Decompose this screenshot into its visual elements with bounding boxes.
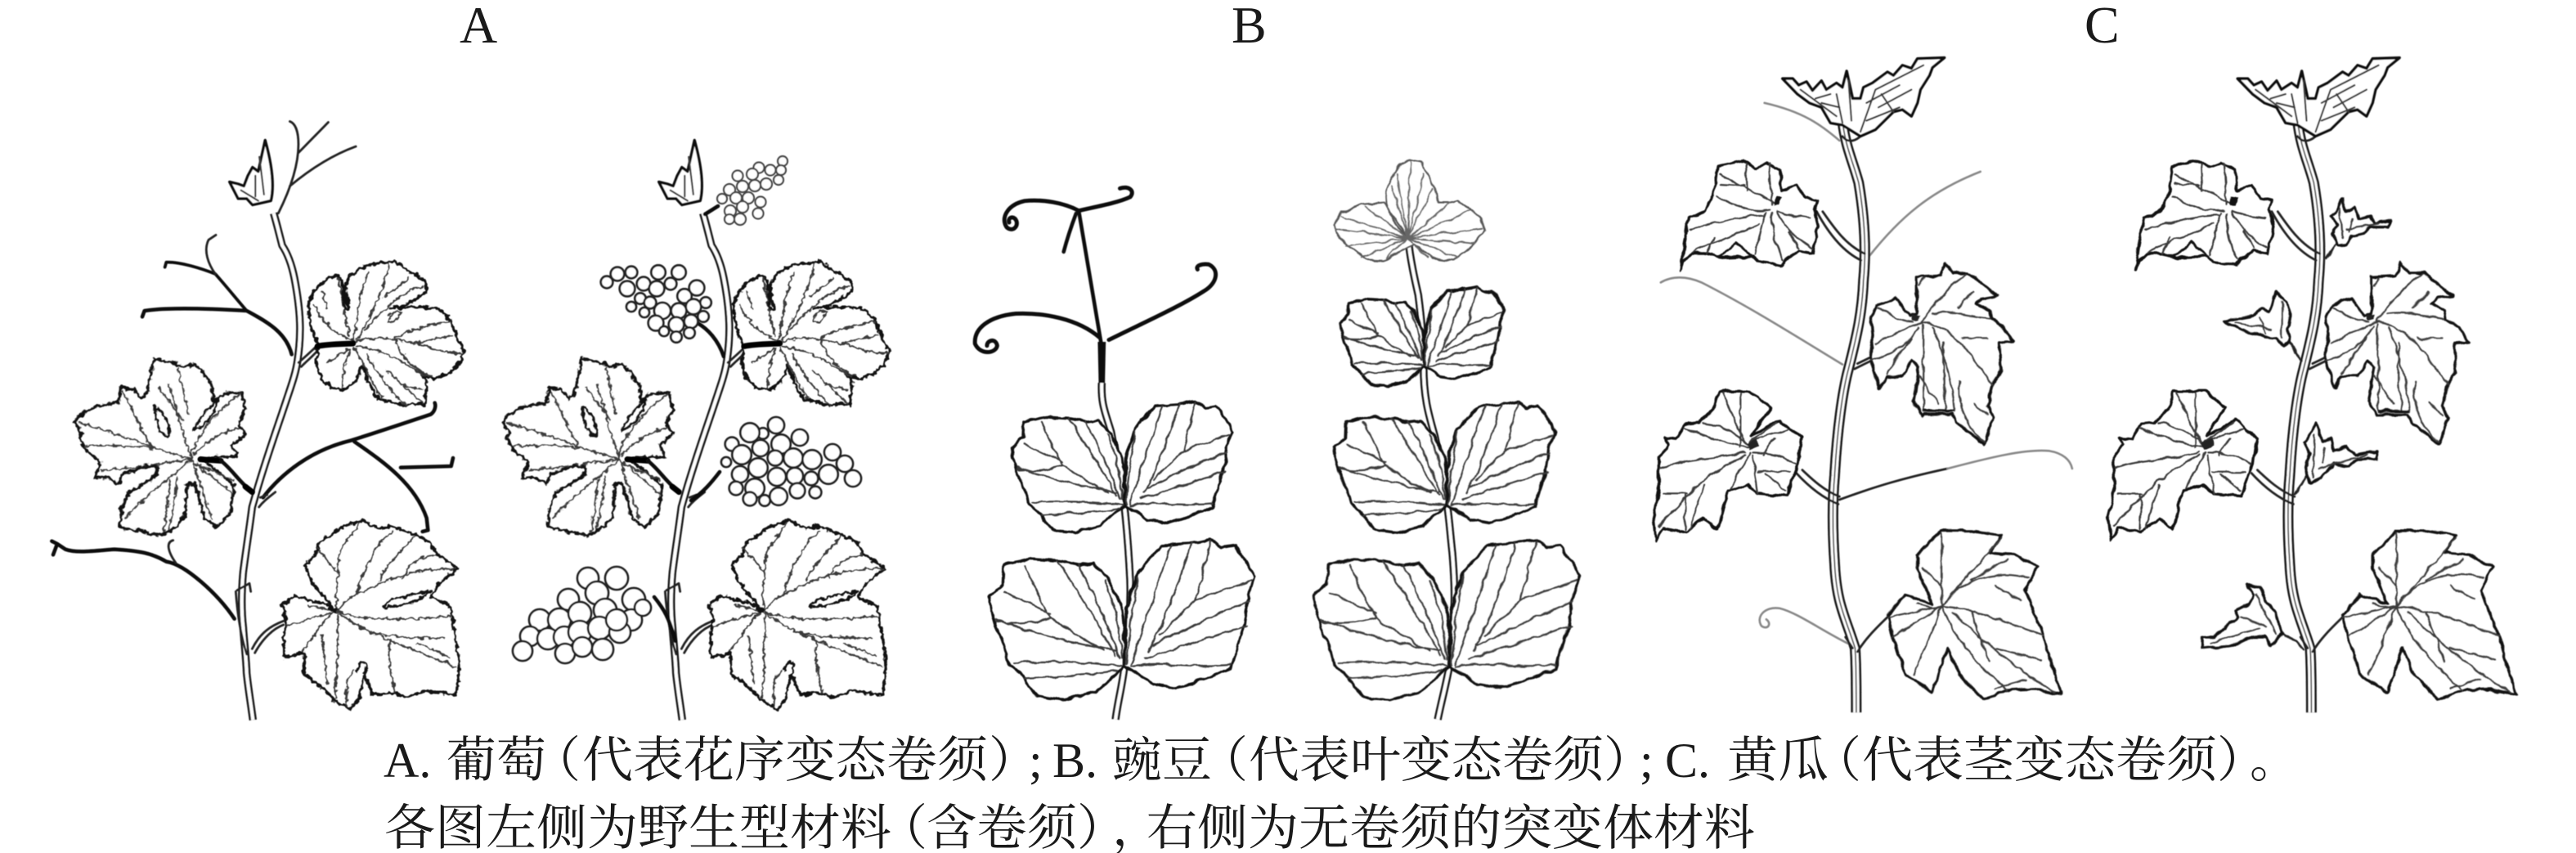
inflorescence-derived tendrils [52,235,453,619]
mutant cucumber stem and apical bud [2237,58,2399,712]
leaves: mutant [503,262,890,710]
caption line 1: A. [384,734,431,788]
panel C: cucumber [1654,58,2516,712]
cucumber leaves: wild type [1654,161,2062,699]
mutant leaflet pair: middle [1334,401,1555,532]
mutant apical bud [659,140,702,205]
cucumber stem and apical bud [1783,58,1945,712]
mutant leaf: upper [734,262,890,406]
mutant leaflet pair: top [1340,287,1505,387]
grape cluster: upper [601,265,711,343]
caption line 1 [384,734,2299,788]
transformed small leaf 1 [2325,198,2390,258]
leaf-derived tendrils [975,187,1216,383]
grape cluster: top [717,156,788,225]
thick petioles: mutant [627,343,780,492]
mutant terminal trifoliate leaf [1335,159,1485,260]
apical bud [230,140,272,205]
top tendrils [278,121,356,213]
caption line 1: ） [989,734,1038,788]
mutant leaf: left [503,358,673,536]
caption line 1: 黄瓜 [1727,734,1829,788]
cucumber leaf: middle right [1870,263,2013,444]
caption line 1: （ [1812,734,1861,788]
pea leaves [990,159,1580,700]
cucumber leaf: middle left [1654,391,1802,541]
cucumber leaf: bottom right [1887,531,2062,699]
mutant cucumber leaf: bottom right [2343,531,2516,699]
transformed small leaf 2 [2224,291,2301,360]
caption line 1: 葡萄 [447,734,546,788]
pea tendrils and stems [975,187,1455,720]
caption line 1: 豌豆 [1112,734,1212,788]
mutant cucumber leaf: top left [2135,161,2273,270]
mutant leaflet pair: lower [1314,540,1580,700]
panel A: grape [52,121,890,720]
caption line 1: 代表花序变态卷须 [582,734,989,788]
mutant stem [665,213,750,720]
caption line 1: ） [2217,734,2266,788]
leaf: lower [282,521,459,710]
caption line 1: 代表茎变态卷须 [1862,734,2218,788]
caption line 2 [384,801,1755,853]
caption line 1: ; [1029,734,1043,788]
pea wild-type stem and tendrils [975,187,1455,720]
leaves: wild type [75,262,464,710]
stem-derived tendrils [1661,103,2072,644]
grape cluster: middle [721,417,861,506]
cluster stalks [654,206,724,641]
caption line 1: ） [1604,734,1653,788]
mutant cucumber leaf: middle right [2325,263,2468,444]
mutant cucumber leaf: middle left [2108,391,2257,541]
caption line 1: 。 [2250,734,2299,788]
panel B: pea [975,159,1580,720]
caption line 1: C. [1665,734,1710,788]
leaflet pair: lower [990,540,1255,700]
leaf: left [75,358,245,536]
cucumber wild type with tendrils [1661,58,2399,712]
mutant pea stem [1408,238,1455,720]
leaf: upper [308,262,464,406]
caption [384,734,2299,853]
thick petioles: wild type [200,343,353,492]
cucumber leaf: top left [1681,161,1818,270]
caption line 1: B. [1052,734,1097,788]
transformed small leaf 3 [2294,423,2378,496]
transformed small leaves [2202,198,2390,649]
grape tendril-less mutant [654,140,750,720]
pea stem [1102,383,1130,720]
grape wild type with tendrils [52,121,453,720]
caption line 1: ; [1640,734,1654,788]
caption line 1: （ [532,734,581,788]
transformed small leaf 4 [2202,584,2304,649]
stem [236,213,321,720]
grape cluster: lower [513,567,651,663]
caption line 1: 代表叶变态卷须 [1249,734,1604,788]
leaflet pair: upper [1012,401,1232,532]
caption line 1: （ [1199,734,1248,788]
mutant leaf: lower [709,521,886,710]
cucumber tendril-less mutant leaves [2108,161,2516,699]
